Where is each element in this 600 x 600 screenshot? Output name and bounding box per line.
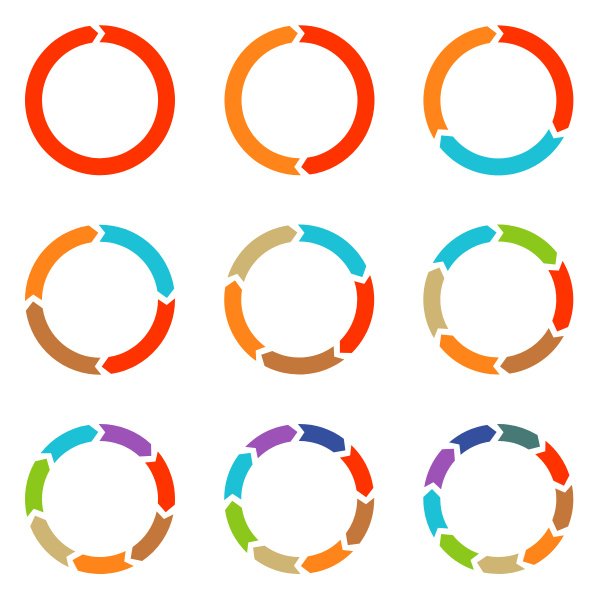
arrow segment: cyan [433, 211, 497, 283]
ring: 6 segments [403, 211, 593, 388]
arrow segment: orange [395, 19, 527, 139]
arrow segment: red [298, 24, 376, 175]
ring: 5 segments [201, 213, 392, 400]
arrow segment: cyan [41, 412, 99, 474]
arrow segment: navy [449, 414, 498, 462]
arrow segment: red [529, 441, 579, 488]
arrow segment: tan [476, 545, 525, 584]
arrow segment: brown [345, 498, 375, 545]
ring: 8 segments [213, 413, 385, 585]
ring: 7 segments [15, 412, 191, 589]
arrow segment: orange [439, 333, 500, 376]
arrow segment: tan [227, 213, 299, 293]
arrow segment: purple [424, 445, 457, 491]
arrow segment: purple [245, 413, 299, 467]
arrow segment: brown [130, 508, 173, 565]
arrow segment: brown [546, 485, 580, 532]
arrow segment: orange [223, 26, 301, 176]
arrow segment: tan [21, 515, 83, 567]
arrow segment: green [15, 458, 59, 517]
ring: 9 segments [412, 414, 580, 584]
ring: 3 segments [395, 19, 574, 202]
arrow segment: red [132, 451, 191, 513]
arrow segment: brown [26, 300, 101, 376]
arrow segment: green [434, 531, 482, 570]
arrow segment: green [497, 223, 557, 266]
ring: 2 segments [223, 24, 376, 176]
ring: 1 segment [24, 24, 176, 176]
arrow segment: orange [520, 523, 564, 573]
arrow segment: red [527, 261, 593, 333]
arrow segment: green [213, 499, 267, 553]
arrow segment: orange [201, 278, 287, 361]
arrow segment: brown [258, 316, 344, 400]
arrow segment: brown [499, 316, 564, 388]
arrow segment: cyan [298, 223, 367, 278]
arrow segment: orange [24, 225, 99, 301]
arrow segment: cyan [412, 488, 456, 538]
arrow segment: teal [497, 423, 540, 450]
arrow segment: red [101, 298, 176, 374]
arrow segment: navy [298, 423, 345, 453]
arrow segment: tan [403, 266, 469, 338]
arrow segment: red [24, 24, 176, 176]
arrow segment: tan [253, 545, 301, 575]
arrow segment: orange [300, 531, 353, 585]
arrow segment: red [319, 275, 392, 357]
arrow segment: orange [72, 536, 134, 589]
arrow segment: red [497, 24, 574, 133]
arrow segment: cyan [99, 223, 174, 299]
arrow segment: purple [99, 423, 151, 457]
arrow segment: red [331, 445, 385, 499]
arrow segment: cyan [223, 453, 253, 500]
ring: 4 segments [24, 223, 176, 376]
arrow segment: cyan [433, 84, 564, 202]
